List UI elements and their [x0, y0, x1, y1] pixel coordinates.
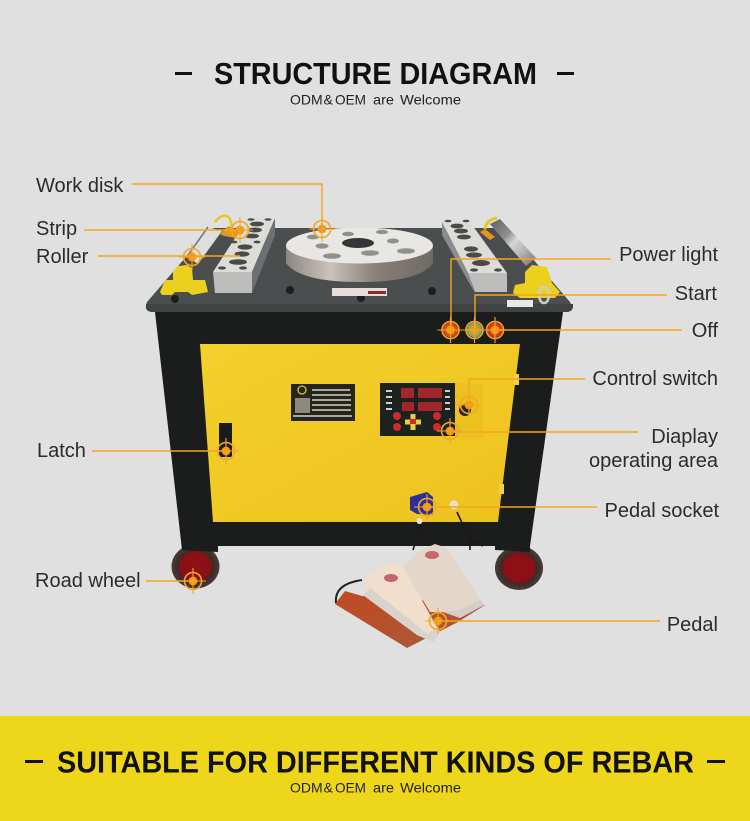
callout: pedal: Pedal	[667, 614, 718, 636]
callout: strip: Strip	[36, 218, 77, 240]
control switch	[459, 404, 471, 416]
banner subheading: &	[324, 780, 334, 796]
callout: display operating area: Diaplay	[651, 426, 718, 448]
callout: latch: Latch	[37, 440, 86, 462]
callout: strip	[36, 217, 253, 243]
left wheel	[172, 544, 220, 588]
callout: display operating area: operating area	[589, 450, 719, 472]
title: structure diagram: STRUCTURE DIAGRAM	[214, 56, 537, 91]
callout: latch	[37, 438, 239, 464]
callout: road wheel: Road wheel	[35, 570, 141, 592]
base knobs and sticker	[171, 286, 533, 307]
title: structure diagram: are	[373, 92, 394, 108]
callout: control switch: Control switch	[592, 368, 718, 390]
callout: start	[462, 283, 717, 343]
callout: work disk: Work disk	[36, 175, 124, 197]
callout: display operating area	[437, 418, 719, 472]
left roller	[160, 216, 240, 295]
control panel	[380, 383, 455, 436]
callout: power light: Power light	[619, 244, 718, 266]
right die block	[442, 220, 507, 293]
machine illustration	[146, 216, 573, 648]
callout: pedal socket	[414, 494, 719, 522]
callout: control switch	[456, 368, 718, 418]
banner subheading: are	[373, 780, 394, 796]
banner subheading: ODM	[290, 780, 323, 796]
title: structure diagram: Welcome	[400, 92, 461, 108]
title: structure diagram: &	[324, 92, 334, 108]
machine body	[155, 312, 563, 552]
callout: power light	[438, 244, 718, 343]
banner subheading	[290, 780, 461, 796]
work disk	[286, 228, 433, 282]
callout: roller: Roller	[36, 246, 89, 268]
callout: pedal	[425, 608, 718, 636]
power buttons	[443, 322, 502, 338]
banner subheading: Welcome	[400, 780, 461, 796]
banner subheading: OEM	[335, 780, 366, 796]
callout: roller	[36, 244, 240, 270]
title: structure diagram: ODM	[290, 92, 323, 108]
callout: off: Off	[692, 320, 718, 342]
callout: pedal socket: Pedal socket	[604, 500, 719, 522]
yellow door	[200, 344, 520, 522]
callout: road wheel	[35, 568, 206, 594]
callout: start: Start	[675, 283, 717, 305]
machine top plate	[146, 228, 572, 312]
yellow banner	[0, 716, 750, 821]
sockets and cables	[410, 492, 483, 550]
callout: off	[482, 317, 718, 343]
pedals	[335, 544, 485, 648]
title: structure diagram	[175, 56, 574, 108]
banner heading: SUITABLE FOR DIFFERENT KINDS OF REBAR	[57, 744, 694, 780]
right roller	[480, 218, 560, 303]
callout: work disk	[36, 175, 335, 242]
nameplate	[291, 384, 355, 421]
title: structure diagram: OEM	[335, 92, 366, 108]
left die block	[213, 218, 275, 293]
right wheel	[495, 546, 543, 590]
